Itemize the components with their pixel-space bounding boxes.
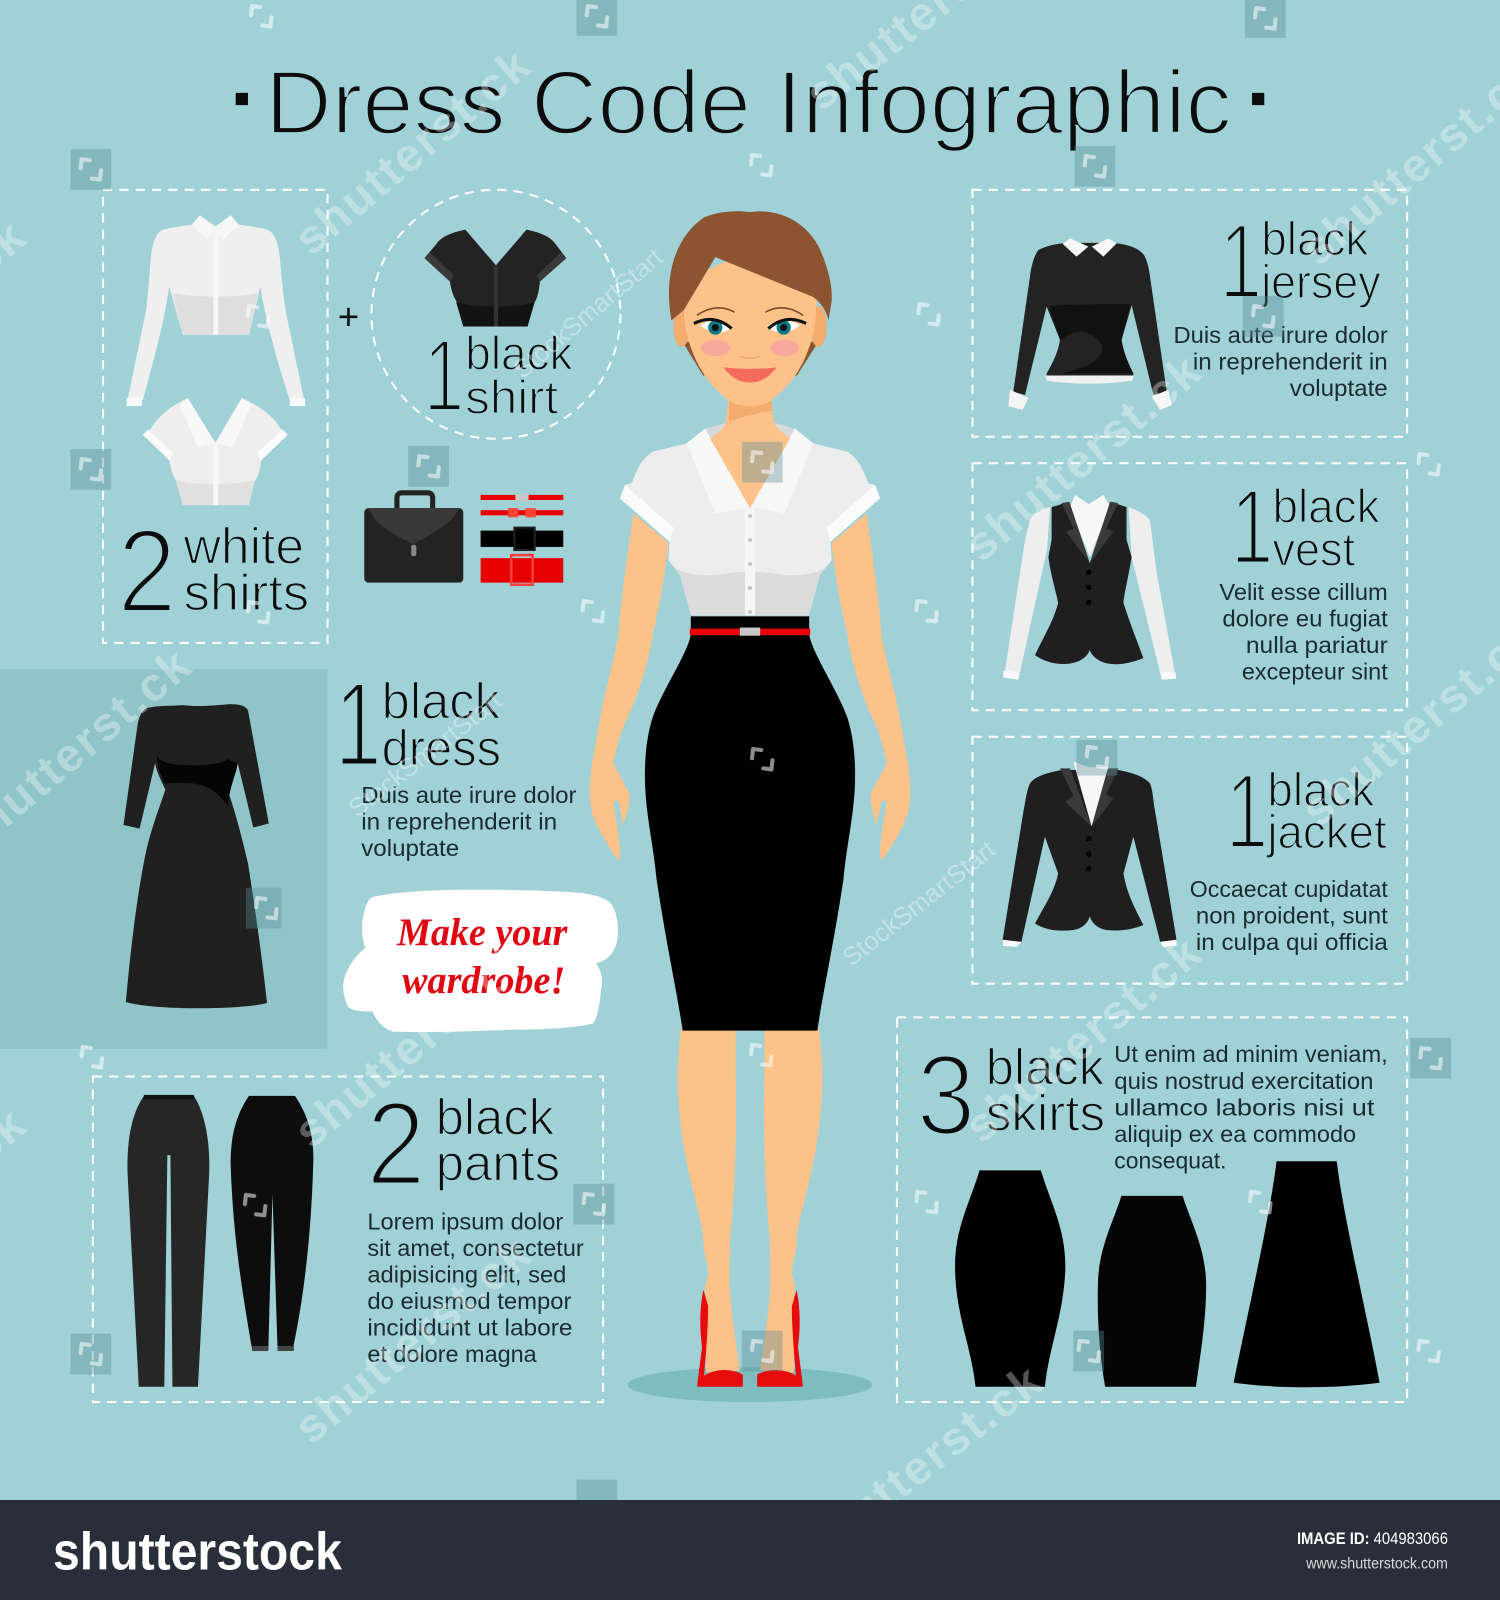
label: 3 black skirts: 3 — [916, 1033, 976, 1160]
text: pants description — [367, 1209, 584, 1367]
text: skirts description: ullamco laboris nisi ut — [1114, 1094, 1375, 1120]
label: 1 black vest — [1231, 466, 1380, 586]
illustration: woman — [590, 211, 910, 1402]
icon: vest body — [1035, 495, 1143, 664]
icon: flared skirt — [1234, 1161, 1380, 1387]
label: 1 black jacket: black — [1267, 764, 1375, 816]
label: 3 black skirts — [916, 1033, 1105, 1160]
face — [684, 258, 816, 406]
text: jersey description: voluptate — [1290, 375, 1388, 401]
text: skirts description — [1114, 1041, 1388, 1173]
text: jacket description: in culpa qui officia — [1196, 929, 1388, 955]
panel: white shirts — [103, 190, 328, 643]
callout: make your wardrobe — [343, 890, 618, 1032]
label: 1 black vest: vest — [1272, 523, 1355, 575]
label: 2 white shirts — [117, 506, 309, 638]
panel: black vest — [972, 463, 1407, 710]
text: jersey description: in reprehenderit in — [1193, 348, 1388, 374]
icon: black jersey — [1008, 238, 1172, 410]
label: 3 black skirts: black — [986, 1039, 1105, 1096]
text: skirts description: quis nostrud exercitation — [1114, 1068, 1373, 1094]
text: dress description — [361, 782, 577, 861]
panel: black jacket — [972, 737, 1407, 984]
text: jersey description: Duis aute irure dolor — [1173, 322, 1388, 348]
text: jacket description: non proident, sunt — [1196, 902, 1388, 928]
label: 1 black jersey: black — [1261, 213, 1369, 265]
text: pants description: et dolore magna — [367, 1341, 537, 1367]
label: 1 black shirt: shirt — [465, 371, 558, 423]
blush — [701, 340, 730, 356]
legs — [678, 1026, 822, 1372]
label: 1 black jersey — [1219, 201, 1381, 321]
icon: briefcase — [364, 493, 463, 583]
label: 1 black jacket: jacket — [1265, 806, 1387, 858]
watermark overlay: shutterst.ck — [955, 344, 1211, 571]
label: 1 black shirt: 1 — [423, 318, 464, 433]
nose — [740, 356, 760, 358]
right arm — [832, 513, 910, 860]
red shoes — [697, 1290, 803, 1387]
label: 2 black pants: 2 — [366, 1079, 426, 1211]
panel: black dress background — [0, 669, 328, 1049]
icon: black shirt — [424, 230, 566, 327]
text: skirts description: consequat. — [1114, 1147, 1227, 1173]
text: vest description — [1219, 579, 1388, 685]
watermark overlay: StockSmartStart — [837, 836, 1001, 972]
label: 1 black jersey: jersey — [1259, 256, 1381, 308]
floor shadow — [628, 1367, 872, 1402]
label: 1 black dress — [335, 658, 501, 791]
label: 1 black dress: black — [382, 672, 500, 729]
back hair — [683, 342, 818, 376]
label: 1 black jacket — [1226, 751, 1387, 871]
label: 1 black jacket: 1 — [1226, 751, 1268, 871]
panel: black jersey — [972, 190, 1407, 437]
icon: slim pants — [231, 1096, 313, 1351]
label: 2 white shirts: shirts — [184, 564, 309, 621]
icon: black dress — [123, 704, 269, 1008]
label: 1 black dress: 1 — [335, 658, 382, 791]
icon: long sleeve white shirt — [127, 215, 305, 406]
label: 1 black shirt: black — [465, 327, 573, 379]
eyebrows — [697, 308, 803, 315]
image id: IMAGE ID: 404983066 — [1297, 1530, 1448, 1548]
callout: make your wardrobe: wardrobe! — [402, 959, 565, 1002]
eyes — [694, 319, 806, 335]
label: 3 black skirts: skirts — [986, 1085, 1105, 1142]
watermark overlay: shutterst.ck — [790, 1354, 1052, 1574]
panel: black skirts — [897, 1017, 1407, 1402]
icon: pencil skirt — [955, 1170, 1065, 1387]
panel: black shirt circle — [371, 190, 620, 439]
text: pants description: do eiusmod tempor — [367, 1288, 572, 1314]
label: 2 black pants: black — [436, 1089, 555, 1146]
black skirt — [645, 616, 855, 1031]
text: jersey description — [1173, 322, 1388, 401]
label: 1 black shirt — [423, 318, 573, 433]
left arm — [590, 513, 668, 860]
label: 1 black vest: black — [1272, 480, 1380, 532]
icon: wide pants — [127, 1095, 209, 1387]
hair — [669, 211, 832, 320]
text: dress description: Duis aute irure dolor — [361, 782, 577, 808]
text: pants description: Lorem ipsum dolor — [367, 1209, 564, 1235]
neck — [710, 393, 790, 508]
icon: white sleeves — [1003, 507, 1176, 680]
text: pants description: sit amet, consectetur — [367, 1235, 584, 1261]
text: dress description: in reprehenderit in — [361, 809, 557, 835]
text: skirts description: Ut enim ad minim veniam, — [1114, 1041, 1388, 1067]
label: 2 black pants — [366, 1079, 560, 1211]
ears — [673, 306, 690, 347]
icon: short sleeve white shirt — [143, 398, 288, 505]
text: vest description: Velit esse cillum — [1219, 579, 1388, 605]
text: dress description: voluptate — [361, 835, 459, 861]
text: vest description: excepteur sint — [1242, 659, 1388, 685]
watermark overlay: StockSmartStart — [508, 243, 669, 384]
text: vest description: dolore eu fugiat — [1222, 606, 1388, 632]
footer bar — [0, 1500, 1500, 1600]
icon: straight skirt — [1098, 1196, 1206, 1387]
icon: belts — [481, 494, 563, 585]
website: www.shutterstock.com — [1305, 1555, 1448, 1572]
label: 2 white shirts: white — [183, 517, 304, 574]
watermark overlay: shutterst.ck — [284, 1227, 540, 1454]
text: vest description: nulla pariatur — [1246, 632, 1388, 658]
watermark overlay: StockSmartStart — [344, 687, 507, 823]
label: 1 black vest: 1 — [1231, 466, 1273, 586]
plus sign: + — [338, 297, 359, 338]
text: skirts description: aliquip ex ea commodo — [1114, 1121, 1356, 1147]
label: 2 black pants: pants — [436, 1135, 560, 1192]
footer logo: shutterstock — [53, 1522, 342, 1581]
callout: make your wardrobe: Make your — [396, 911, 568, 954]
watermark overlay: shutterst.ck — [955, 926, 1211, 1153]
text: jacket description — [1190, 876, 1388, 955]
label: 1 black jersey: 1 — [1219, 201, 1262, 321]
text: pants description: incididunt ut labore — [367, 1315, 572, 1341]
label: 2 white shirts: 2 — [117, 506, 177, 638]
panel: black pants — [93, 1077, 603, 1402]
mouth — [723, 367, 777, 383]
icon: black jacket — [1003, 762, 1177, 947]
text: pants description: adipisicing elit, sed — [367, 1262, 566, 1288]
label: 1 black dress: dress — [382, 719, 501, 776]
watermark overlay: shutterst.ck — [284, 38, 540, 265]
watermark overlay: shutterst.ck — [284, 931, 540, 1158]
white blouse — [620, 422, 880, 615]
title: Dress Code Infographic — [265, 54, 1232, 154]
red belt — [690, 628, 810, 636]
text: jacket description: Occaecat cupidatat — [1190, 876, 1388, 902]
